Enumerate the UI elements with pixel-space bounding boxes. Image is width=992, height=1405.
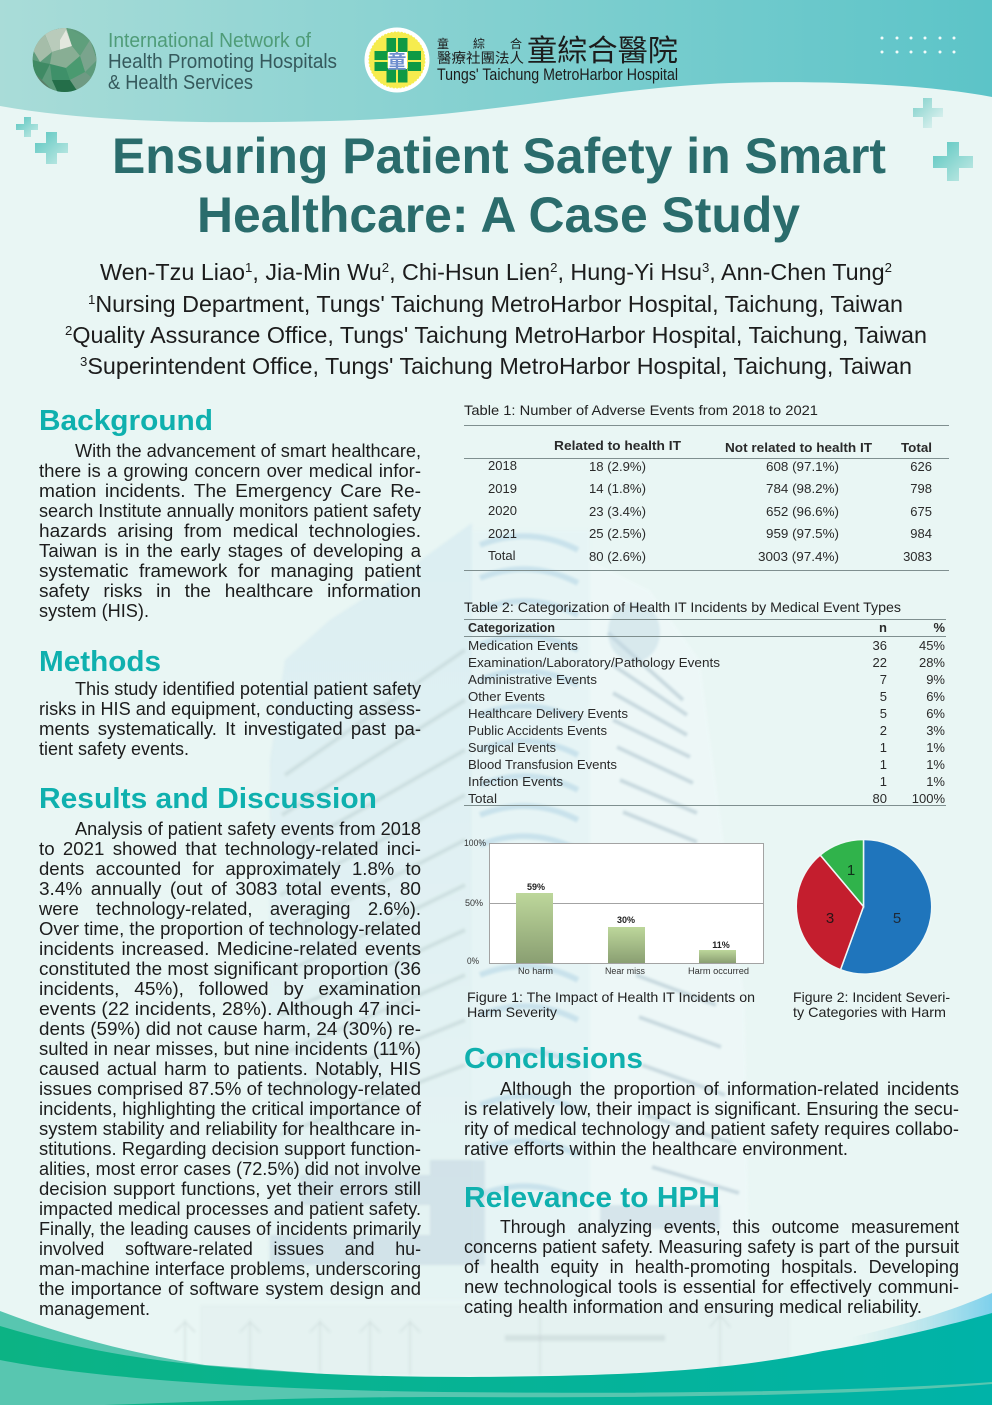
table 2: categorization: 1 [880,774,887,789]
text: Background body: search Institute annually monitors patient safety [39,501,421,521]
text: Results and Discussion body: stitutions. Regarding decision support function- [39,1139,421,1159]
heading: Conclusions: Conclusions [464,1043,643,1075]
table 2: categorization: 5 [880,706,887,721]
authors and affiliations: , Chi-Hsun Lien [389,259,550,285]
title: Healthcare: A Case Study [197,187,800,243]
table 2: categorization: 6% [926,689,945,704]
text: Background body: safety risks in the healthcare information [39,581,421,601]
figure 2: pie chart: 1 [847,862,855,879]
text: Results and Discussion body: were technology-related, averaging 2.6%). [38,899,421,919]
text: Results and Discussion body: Analysis of patient safety events from 2018 [75,819,421,839]
table 2: categorization: 28% [919,655,945,670]
figure 2 caption [793,989,950,1020]
text: Results and Discussion body: dents (59%) did not cause harm, 24 (30%) re- [39,1019,421,1039]
text: Background body: hazards arising from medical technologies. [39,521,421,541]
table 1: adverse events: 25 (2.5%) [589,526,646,541]
authors and affiliations: Quality Assurance Office, Tungs' Taichung MetroHarbor Hospital, Taichung, Taiwan [72,322,927,348]
text: Methods body: ments systematically. It investigated past pa- [39,719,421,739]
text: Relevance to HPH body: concerns patient safety. Measuring safety is part of the pursuit [464,1237,959,1257]
table 1: adverse events [464,402,949,570]
HPH network name: & Health Services [108,72,253,94]
authors and affiliations: Superintendent Office, Tungs' Taichung MetroHarbor Hospital, Taichung, Taiwan [87,353,912,379]
table 2: categorization: 5 [880,689,887,704]
figure 1: bar chart: 50% [465,898,483,908]
figure 1: bar chart: Harm occurred [688,966,749,976]
table 2: categorization: 7 [880,672,887,687]
table 1: adverse events: 3083 [903,549,932,564]
table 1: adverse events: 652 (96.6%) [766,504,839,519]
icon: Tungs hospital emblem: 童 [387,50,407,73]
heading: Relevance to HPH: Relevance to HPH [464,1182,720,1214]
figure 1: bar chart: No harm [518,966,553,976]
table 1: adverse events: 608 (97.1%) [766,459,839,474]
table 2: categorization: Surgical Events [468,740,556,755]
authors and affiliations: 2 [550,260,557,275]
authors and affiliations: 2 [65,323,72,338]
text: Relevance to HPH body: of health equity in health-promoting hospitals. Developing [464,1257,959,1277]
text: Results and Discussion body: management. [39,1299,150,1319]
authors and affiliations: Wen-Tzu Liao [100,259,243,285]
icon: plus signs left [16,117,68,164]
figure 1: bar chart [464,838,764,976]
text: Methods body: risks in HIS and equipment, conducting assess- [39,699,421,719]
table 2: categorization: Examination/Laboratory/Pathology Events [468,655,721,670]
authors and affiliations: 2 [885,260,892,275]
icon: plus signs right [913,98,973,181]
text: Results and Discussion body: the importance of software system design and [39,1279,421,1299]
hospital name: Tungs' Taichung MetroHarbor Hospital [437,65,678,84]
authors and affiliations: 3 [702,260,709,275]
text: Background body: Taiwan is in the early stages of developing a [39,541,422,561]
table 2: categorization: 80 [873,791,887,806]
text: Background body [39,441,422,621]
heading: Results and Discussion: Results and Discussion [39,783,377,815]
table 2: categorization: Healthcare Delivery Events [468,706,629,721]
table 1: adverse events: 2021 [488,526,517,541]
figure 1 caption: Harm Severity [467,1004,557,1020]
authors and affiliations: 3 [80,354,87,369]
table 2: categorization: 3% [926,723,945,738]
text: Results and Discussion body: incidents, highlighting the critical importance of [39,1099,422,1119]
text: Results and Discussion body: issues comprised 87.5% of technology-related [39,1079,421,1099]
text: Background body: there is a growing concern over medical infor- [39,461,421,481]
figure 2 caption: Figure 2: Incident Severi- [793,989,950,1005]
text: Relevance to HPH body: cating health information and ensuring medical reliability. [464,1297,922,1317]
figure 1: bar chart: 59% [527,882,545,892]
heading: Background: Background [39,405,213,437]
table 2: categorization: 45% [919,638,945,653]
text: Conclusions body: rity of medical technology and patient safety requires collabo- [464,1119,959,1139]
table 2: categorization: % [933,620,945,635]
text: Conclusions body: is relatively low, their impact is significant. Ensuring the secu- [464,1099,959,1119]
table 2: categorization: 1 [880,740,887,755]
table 2: categorization: Categorization [468,620,555,635]
table 2: categorization: 100% [912,791,945,806]
text: Methods body: tient safety events. [39,739,189,759]
authors and affiliations: Nursing Department, Tungs' Taichung MetroHarbor Hospital, Taichung, Taiwan [95,291,903,317]
figure 2: pie chart: 5 [893,910,901,927]
text: Background body: mation incidents. The Emergency Care Re- [39,481,421,501]
text: Results and Discussion body: Over time, the proportion of technology-related [39,919,421,939]
hospital name: 合 [510,36,522,51]
text: Results and Discussion body: to 2021 showed that technology-related inci- [39,839,421,859]
background: hospital building photo [175,523,790,1375]
hospital name: 童綜合醫院 [527,35,678,68]
table 1: adverse events: 2019 [488,481,517,496]
figure 2 caption: ty Categories with Harm [793,1004,946,1020]
HPH network name: Health Promoting Hospitals [108,51,337,73]
table 1: adverse events: 984 [910,526,932,541]
table 2: categorization: Public Accidents Events [468,723,607,738]
figure 1: bar chart: Near miss [605,966,645,976]
text: Relevance to HPH body [464,1217,959,1317]
text: Results and Discussion body: dents accounted for approximately 1.8% to [39,859,421,879]
table 1: adverse events: 14 (1.8%) [589,481,646,496]
hospital name: 醫療社團法人 [437,50,524,66]
table 1: adverse events: 2018 [488,458,517,473]
text: Relevance to HPH body: Through analyzing events, this outcome measurement [500,1217,959,1237]
table 1: adverse events: 2020 [488,503,517,518]
table 2: categorization: 6% [926,706,945,721]
table 1: adverse events: Total [901,440,932,455]
text: Results and Discussion body: incidents increased. Medicine-related events [39,939,421,959]
table 2: categorization: 1 [880,757,887,772]
text: Conclusions body: Although the proportion of information-related incidents [500,1079,959,1099]
text: Results and Discussion body: involved software-related issues and hu- [39,1239,421,1259]
table 2: categorization: 2 [880,723,887,738]
authors and affiliations: 2 [382,260,389,275]
footer waves [0,1293,992,1405]
text: Results and Discussion body: alities, most error cases (72.5%) did not involve [39,1159,421,1179]
table 1: adverse events: 23 (3.4%) [589,504,646,519]
table 2: categorization: Administrative Events [468,672,598,687]
authors and affiliations: 1 [245,260,252,275]
heading: Methods: Methods [39,646,161,678]
hospital name: 童 [437,36,449,51]
authors and affiliations: 1 [88,292,95,307]
text: Results and Discussion body: decision support functions, yet their errors still [39,1179,421,1199]
title: Ensuring Patient Safety in Smart [112,128,886,184]
table 1: adverse events: 798 [910,481,932,496]
hospital name: 綜 [473,36,485,51]
hospital name [437,35,678,84]
table 2: categorization: n [879,620,887,635]
figure 1: bar chart: 0% [467,956,479,966]
table 2: categorization: 22 [873,655,887,670]
figure 2: pie chart [796,839,932,974]
table 2: categorization: 36 [873,638,887,653]
table 1: adverse events: 3003 (97.4%) [758,549,839,564]
table 2: categorization [464,599,946,806]
text: Results and Discussion body: incidents, 45%), followed by examination [39,979,421,999]
figure 1: bar chart: 100% [464,838,486,848]
figure 1 caption: Figure 1: The Impact of Health IT Incidents on [467,989,755,1005]
text: Methods body [39,679,421,759]
text: Results and Discussion body: system stability and reliability for healthcare in- [39,1119,421,1139]
table 1: adverse events: Not related to health IT [725,440,872,455]
table 2: categorization: 9% [926,672,945,687]
text: Results and Discussion body: caused actual harm to patients. Notably, HIS [39,1059,421,1079]
table 2: categorization: Table 2: Categorization of Health IT Incidents by Medical Event Types [464,599,901,615]
text: Background body: system (HIS). [39,601,149,621]
HPH network name: International Network of [108,30,311,52]
text: Results and Discussion body: constituted the most significant proportion (36 [39,959,421,979]
table 1: adverse events: 80 (2.6%) [589,549,646,564]
authors and affiliations: , Hung-Yi Hsu [557,259,702,285]
table 1: adverse events: 784 (98.2%) [766,481,839,496]
text: Background body: systematic framework for managing patient [39,561,421,581]
table 2: categorization: 1% [926,774,945,789]
text: Results and Discussion body: sulted in near misses, but nine incidents (11%) [39,1039,421,1059]
text: Results and Discussion body: impacted medical processes and patient safety. [39,1199,421,1219]
text: Relevance to HPH body: new technological tools is essential for effectively communi- [464,1277,959,1297]
figure 2: pie chart: 3 [826,910,834,927]
text: Results and Discussion body: man-machine interface problems, underscoring [39,1259,421,1279]
header band [0,0,992,122]
text: Results and Discussion body: Finally, the leading causes of incidents primarily [39,1219,421,1239]
text: Results and Discussion body: 3.4% annually (out of 3083 total events, 80 [39,879,421,899]
title [112,128,886,243]
table 2: categorization: 1% [926,740,945,755]
figure 1 caption [467,989,755,1020]
table 2: categorization: Infection Events [468,774,564,789]
icon: Tungs hospital emblem [364,28,430,92]
table 1: adverse events: 18 (2.9%) [589,459,646,474]
table 1: adverse events: 675 [910,504,932,519]
figure 1: bar chart: 30% [617,915,635,925]
table 2: categorization: Other Events [468,689,545,704]
text: Results and Discussion body [38,819,422,1319]
authors and affiliations: , Jia-Min Wu [252,259,382,285]
table 2: categorization: Medication Events [468,638,579,653]
text: Conclusions body: rative efforts within the healthcare environment. [464,1139,848,1159]
figure 1: bar chart: 11% [712,940,730,950]
HPH network name [108,30,337,94]
text: Background body: With the advancement of smart healthcare, [75,441,421,461]
table 1: adverse events: Total [488,548,516,563]
text: Methods body: This study identified potential patient safety [75,679,421,699]
text: Results and Discussion body: events (22 incidents, 28%). Although 47 inci- [39,999,421,1019]
table 1: adverse events: Table 1: Number of Adverse Events from 2018 to 2021 [464,402,818,418]
icon: HPH faceted globe logo [32,27,97,93]
authors and affiliations [65,259,927,379]
table 2: categorization: 1% [926,757,945,772]
table 1: adverse events: 959 (97.5%) [766,526,839,541]
table 1: adverse events: Related to health IT [554,438,681,453]
table 1: adverse events: 626 [910,459,932,474]
table 2: categorization: Blood Transfusion Events [468,757,618,772]
table 2: categorization: Total [468,791,497,806]
decorative dots [880,36,956,54]
authors and affiliations: , Ann-Chen Tung [709,259,885,285]
text: Conclusions body [464,1079,959,1159]
